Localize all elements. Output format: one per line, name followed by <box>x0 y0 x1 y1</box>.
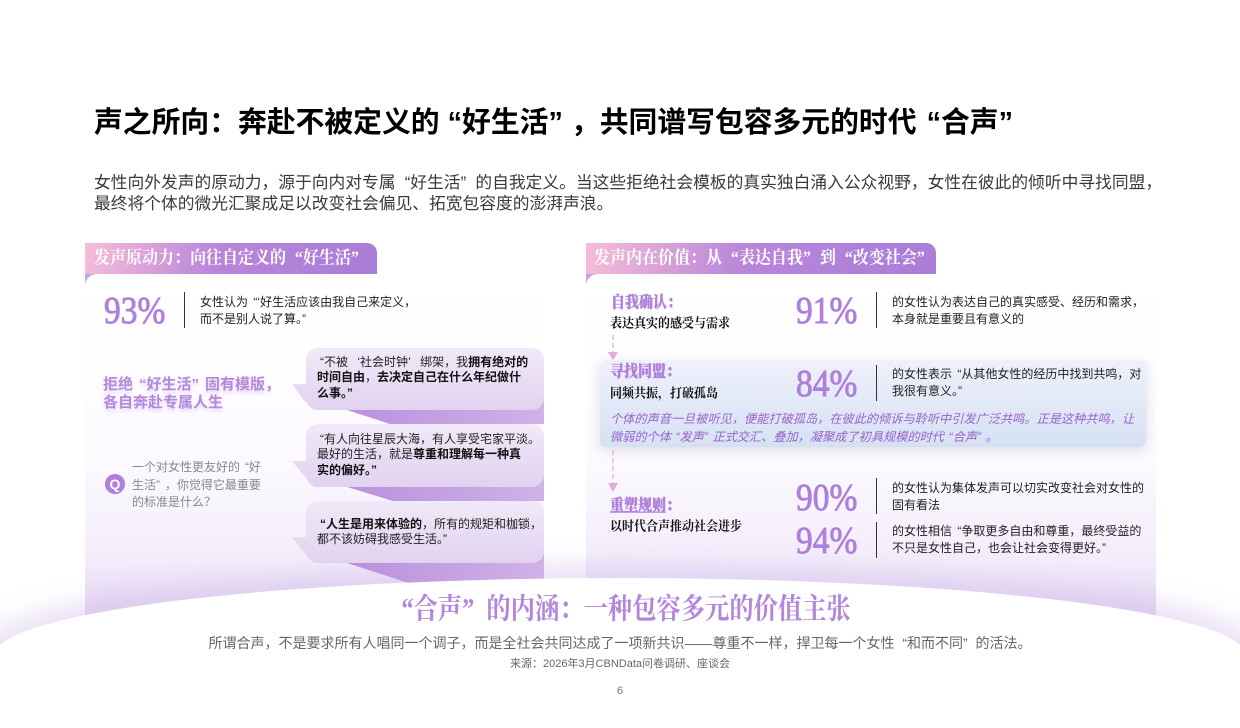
quote 3 <box>317 517 542 546</box>
label: 自我确认： <box>611 295 681 312</box>
right header text: 发声内在价值：从 “表达自我” 到 “改变社会” <box>594 249 925 268</box>
divider and quote: 女性认为 “‘好生活应该由我自己来定义， <box>200 295 416 309</box>
highlight panel: find allies <box>600 360 1146 447</box>
intro text: 女性向外发声的原动力，源于向内对专属 “好生活” 的自我定义。当这些拒绝社会模板的真实独白涌入公众视野，女性在彼此的倾听中寻找同盟， <box>94 173 1162 192</box>
stat text 91% <box>876 292 1144 328</box>
quote bubbles <box>292 348 544 585</box>
block: self confirmation <box>610 293 730 331</box>
divider and quote <box>184 292 444 328</box>
panel: left header <box>85 243 377 274</box>
quote 1 <box>317 355 528 400</box>
stat text 90%: 固有看法 <box>892 498 940 512</box>
stat text 94% <box>876 522 1141 558</box>
quote 3: 都不该妨碍我感受生活。” <box>317 532 447 546</box>
divider and quote: 而不是别人说了算。” <box>200 312 306 326</box>
stat 91%: 91% <box>796 290 857 332</box>
italic note <box>610 412 1134 444</box>
quote 2 <box>317 432 540 477</box>
stat text 91%: 本身就是重要且有意义的 <box>892 312 1024 326</box>
title: 声之所向：奔赴不被定义的 “好生活” ，共同谱写包容多元的时代 “合声” <box>94 107 1013 139</box>
sub label: 表达真实的感受与需求 <box>610 315 730 331</box>
panel: right header <box>586 243 936 274</box>
icon: Q <box>105 474 125 494</box>
question text: 生活” ，你觉得它最重要 <box>132 478 261 492</box>
question text: 的标准是什么？ <box>132 495 216 509</box>
sub label: 以时代合声推动社会进步 <box>610 518 742 534</box>
italic note: 微弱的个体 “发声” 正式交汇、叠加，凝聚成了初具规模的时代 “合声” 。 <box>610 430 998 444</box>
block: find allies <box>610 362 718 401</box>
left header text: 发声原动力：向往自定义的 “好生活” <box>94 249 359 268</box>
stat text 90% <box>876 478 1144 514</box>
arrow: down flow <box>608 335 618 492</box>
page number: 6 <box>617 685 623 697</box>
stat 84%: 84% <box>796 363 857 405</box>
question text: 一个对女性更友好的 “好 <box>132 460 261 474</box>
stat text 84%: 的女性表示 “从其他女性的经历中找到共鸣，对 <box>892 367 1141 381</box>
quote 2: 实的偏好。” <box>317 463 377 477</box>
stat 94%: 94% <box>796 520 857 562</box>
quote 3: “人生是用来体验的，所有的规矩和枷锁， <box>320 517 542 531</box>
italic note: 个体的声音一旦被听见，便能打破孤岛，在彼此的倾诉与聆听中引发广泛共鸣。正是这种共鸣，让 <box>610 412 1134 426</box>
label: 寻找同盟： <box>610 364 680 381</box>
sub label: 同频共振，打破孤岛 <box>610 385 718 401</box>
stat text 94%: 的女性相信 “争取更多自由和尊重，最终受益的 <box>892 524 1141 538</box>
quote 1: “不被 ‘社会时钟’ 绑架，我拥有绝对的 <box>320 355 528 369</box>
question block <box>105 460 261 509</box>
icon: Q: Q <box>110 476 120 492</box>
stat text 94%: 不只是女性自己，也会让社会变得更好。” <box>892 541 1106 555</box>
stat text 84% <box>876 365 1141 401</box>
source: 来源：2026年3月CBNData问卷调研、座谈会 <box>510 658 730 670</box>
quote 1: 时间自由，去决定自己在什么年纪做什 <box>317 370 521 384</box>
stat 93% <box>104 290 416 332</box>
stat 90%: 90% <box>796 477 857 519</box>
heading: reject template: 各自奔赴专属人生 <box>103 394 223 410</box>
intro text <box>94 173 1162 213</box>
heading: reject template <box>103 376 280 412</box>
heading: reject template: 拒绝 “好生活” 固有模版， <box>103 376 280 393</box>
label: 重塑规则： <box>610 498 680 515</box>
question text <box>132 460 261 509</box>
bottom heading: “合声” 的内涵：一种包容多元的价值主张 <box>401 593 851 626</box>
stat text 91%: 的女性认为表达自己的真实感受、经历和需求， <box>892 295 1144 309</box>
intro text: 最终将个体的微光汇聚成足以改变社会偏见、拓宽包容度的澎湃声浪。 <box>94 194 613 213</box>
stat text 90%: 的女性认为集体发声可以切实改变社会对女性的 <box>892 481 1144 495</box>
quote 2: “有人向往星辰大海，有人享受宅家平淡。 <box>320 432 540 446</box>
block: reshape rules <box>610 496 742 534</box>
quote 1: 么事。” <box>317 386 353 400</box>
bottom text: 所谓合声，不是要求所有人唱同一个调子，而是全社会共同达成了一项新共识——尊重不一样，捍卫每一个女性 “和而不同” 的活法。 <box>209 635 1031 651</box>
stat text 84%: 我很有意义。” <box>892 384 962 398</box>
number 93%: 93% <box>104 290 165 332</box>
quote 2: 最好的生活，就是尊重和理解每一种真 <box>317 447 521 461</box>
